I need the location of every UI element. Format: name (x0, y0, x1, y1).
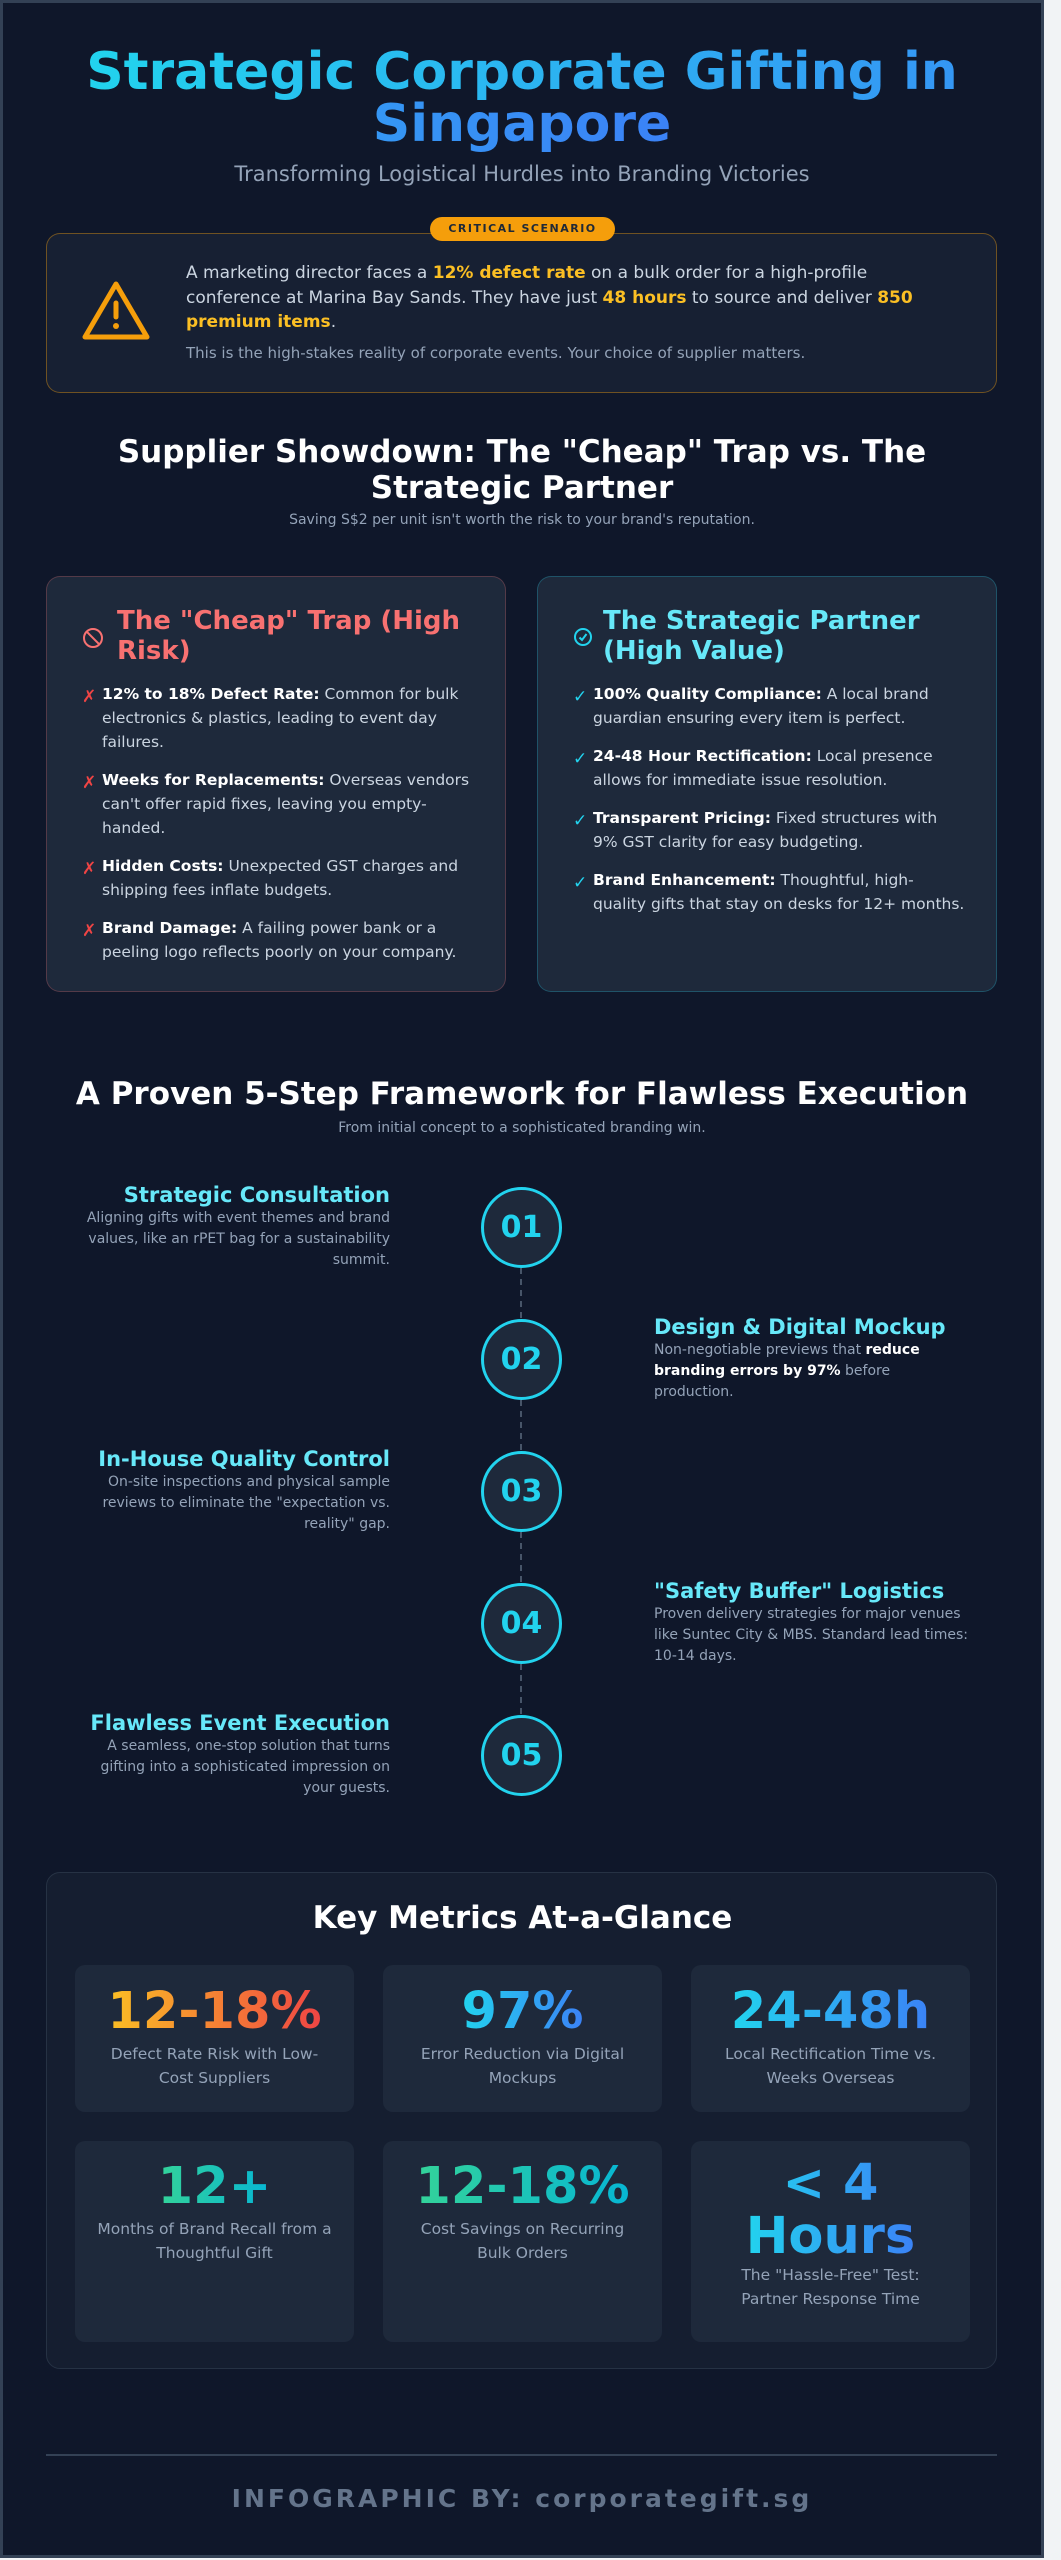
metric 5 (383, 2141, 662, 2342)
list: risks: Weeks for Replacements: Overseas vendors can't offer rapid fixes, leaving you empty-handed. (102, 771, 469, 837)
scenario text: A marketing director faces a 12% defect rate on a bulk order for a high-profile conference at Marina Bay Sands. They have just 48 hours to source and deliver 850 premium items. (186, 263, 913, 332)
panel: key metrics (46, 1872, 997, 2369)
list: risks: ✗ (82, 773, 96, 793)
metric 6: Hours (746, 2207, 915, 2266)
timeline: On-site inspections and physical sample reviews to eliminate the "expectation vs. reality" gap. (102, 1474, 390, 1532)
metric 6: < 4 (782, 2154, 878, 2213)
metric 1: 12-18% (107, 1982, 322, 2041)
list: benefits: ✓ (573, 873, 587, 893)
badge: critical scenario: CRITICAL SCENARIO (448, 222, 597, 235)
list: benefits: 100% Quality Compliance: A local brand guardian ensuring every item is perfect. (593, 685, 929, 727)
list: benefits: Brand Enhancement: Thoughtful, high- (593, 871, 914, 889)
list: benefits: 9% GST clarity for easy budgeting. (593, 833, 863, 851)
metric 4: 12+ (158, 2157, 271, 2216)
step 2 (481, 1319, 562, 1400)
scenario text: This is the high-stakes reality of corporate events. Your choice of supplier matters. (186, 344, 805, 362)
list: risks: Hidden Costs: Unexpected GST charges and shipping fees inflate budgets. (102, 857, 458, 899)
timeline: Strategic Consultation (124, 1183, 390, 1207)
heading: framework: A Proven 5-Step Framework for Flawless Execution (76, 1076, 968, 1112)
metric 6 (691, 2141, 970, 2342)
timeline: Flawless Event Execution (90, 1711, 390, 1735)
step 3 (481, 1451, 562, 1532)
step 5: 05 (501, 1738, 542, 1773)
panel: critical scenario (46, 233, 997, 393)
list: risks: ✗ (82, 687, 96, 707)
list: benefits (573, 685, 964, 913)
metric 5: 12-18% (415, 2157, 630, 2216)
panel: strategic partner (537, 576, 997, 992)
subheading: framework: From initial concept to a sophisticated branding win. (338, 1120, 706, 1136)
list: risks: Brand Damage: A failing power bank or a peeling logo reflects poorly on your company. (102, 919, 456, 961)
step 3: 03 (501, 1474, 542, 1509)
heading: strategic partner: The Strategic Partner (High Value) (603, 606, 920, 666)
timeline (87, 1183, 968, 1796)
metric 3 (691, 1965, 970, 2112)
timeline: A seamless, one-stop solution that turns gifting into a sophisticated impression on your guests. (100, 1738, 390, 1796)
heading: cheap trap: The "Cheap" Trap (High Risk) (117, 606, 460, 666)
badge: critical scenario (430, 217, 615, 241)
subheading: Saving S$2 per unit isn't worth the risk to your brand's reputation. (289, 512, 755, 528)
list: benefits: quality gifts that stay on desks for 12+ months. (593, 895, 964, 913)
metric 1: Defect Rate Risk with Low-Cost Suppliers (111, 2045, 318, 2087)
icon: warning (82, 282, 150, 340)
metric 2: Error Reduction via Digital Mockups (421, 2045, 624, 2087)
subtitle: Transforming Logistical Hurdles into Branding Victories (234, 162, 810, 186)
step 5 (481, 1715, 562, 1796)
list: risks (82, 685, 469, 961)
list: benefits: ✓ (573, 687, 587, 707)
list: benefits: ✓ (573, 811, 587, 831)
heading: supplier showdown: Supplier Showdown: The "Cheap" Trap vs. The Strategic Partner (118, 434, 926, 506)
title: Strategic Corporate Gifting in Singapore (86, 42, 958, 154)
list: benefits: Transparent Pricing: Fixed structures with (593, 809, 937, 827)
metric 2: 97% (461, 1982, 584, 2041)
panel: cheap trap (46, 576, 506, 992)
heading: key metrics: Key Metrics At-a-Glance (313, 1900, 732, 1936)
list: risks: ✗ (82, 921, 96, 941)
metric 2 (383, 1965, 662, 2112)
metric 1 (75, 1965, 354, 2112)
timeline: Aligning gifts with event themes and brand values, like an rPET bag for a sustainability summit. (87, 1210, 390, 1268)
step 4 (481, 1583, 562, 1664)
timeline: In-House Quality Control (98, 1447, 390, 1471)
metric 4 (75, 2141, 354, 2342)
footer credit: INFOGRAPHIC BY: corporategift.sg (232, 2484, 812, 2513)
timeline: Non-negotiable previews that reduce branding errors by 97% before production. (654, 1342, 920, 1400)
metric 3: Local Rectification Time vs. Weeks Overseas (725, 2045, 936, 2087)
timeline: Proven delivery strategies for major venues like Suntec City & MBS. Standard lead times: 10-14 days. (654, 1606, 968, 1664)
list: risks: ✗ (82, 859, 96, 879)
metric 5: Cost Savings on Recurring Bulk Orders (421, 2220, 624, 2262)
step 4: 04 (501, 1606, 542, 1641)
step 1 (481, 1187, 562, 1268)
metric 6: The "Hassle-Free" Test: Partner Response Time (741, 2266, 920, 2308)
list: benefits: ✓ (573, 749, 587, 769)
timeline: Design & Digital Mockup (654, 1315, 946, 1339)
timeline: "Safety Buffer" Logistics (654, 1579, 944, 1603)
step 2: 02 (501, 1342, 542, 1377)
metric 3: 24-48h (731, 1982, 930, 2041)
step 1: 01 (501, 1210, 542, 1245)
metric 4: Months of Brand Recall from a Thoughtful Gift (97, 2220, 332, 2262)
list: benefits: 24-48 Hour Rectification: Local presence allows for immediate issue resolution. (593, 747, 933, 789)
list: risks: 12% to 18% Defect Rate: Common for bulk electronics & plastics, leading to event day failures. (102, 685, 458, 751)
